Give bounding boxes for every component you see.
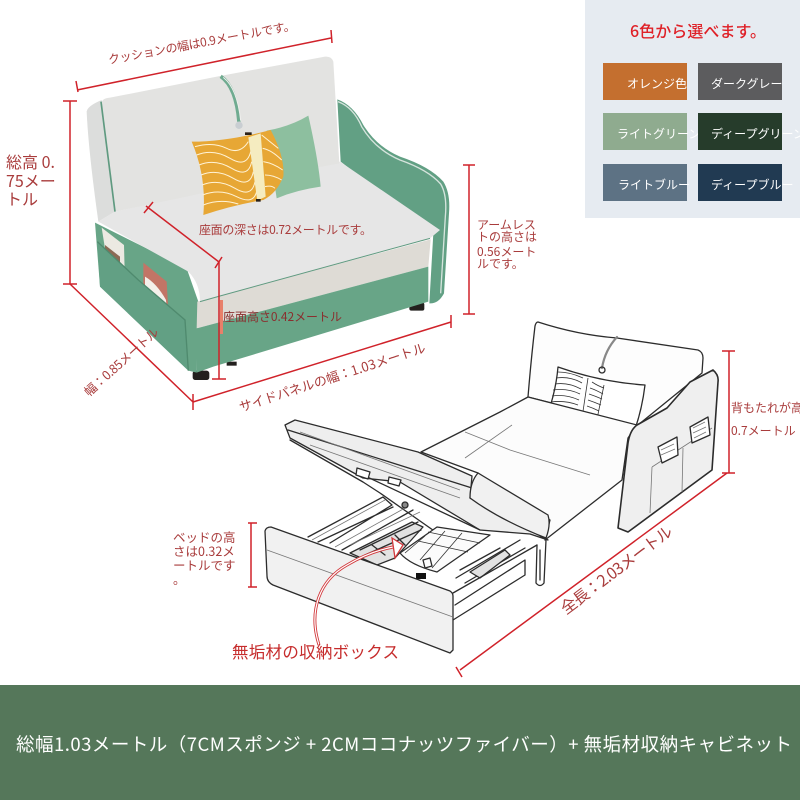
pocket	[97, 242, 188, 371]
backrest	[528, 322, 703, 425]
dimension: total length: 全長：2.03メートル	[555, 519, 677, 619]
folded blanket	[400, 527, 490, 572]
heading: six colours: 6色から選べます。	[630, 18, 766, 42]
swatch: light blue	[603, 164, 690, 201]
swatch: deep blue	[698, 164, 793, 201]
seat cushion	[98, 162, 440, 302]
metal leg	[536, 540, 546, 586]
dimension: side panel width: サイドパネルの幅：1.03メートル	[236, 337, 428, 416]
footer banner	[0, 685, 800, 800]
back cushion	[102, 57, 339, 212]
cushion end and lifted panel	[285, 420, 549, 540]
dimension: cushion width: クッションの幅は0.9メートルです。	[107, 17, 297, 68]
dimension: total height	[6, 101, 77, 284]
dimension: total height: 総高 0.	[6, 149, 55, 173]
arrow: to storage box	[315, 538, 403, 645]
dimension: armrest height	[463, 165, 537, 314]
dimension: seat height	[212, 262, 342, 379]
throw pillow	[548, 367, 645, 432]
footer text: 総幅1.03メートル（7CMスポンジ + 2CMココナッツファイバー）+ 無垢材収納キャビネット	[16, 731, 792, 757]
dimension: armrest height: トの高さは	[477, 228, 537, 245]
dimension: back height: 0.7メートル	[731, 422, 796, 439]
dimension: bed height: ベッドの高	[173, 527, 236, 546]
dimension: seat height: 座面高さ0.42メートル	[223, 308, 342, 325]
dimension: back height	[722, 351, 800, 473]
illustration: line-art open sofa bed	[265, 322, 718, 653]
arm	[337, 99, 449, 303]
swatch: orange	[603, 63, 687, 100]
wheels	[193, 303, 424, 380]
dimension: bed height: ートルです	[173, 555, 236, 574]
dimension: bed height: さは0.32メ	[173, 541, 235, 560]
swatch: light blue: ライトブルー	[618, 176, 690, 193]
storage box interior	[308, 497, 537, 620]
swatch: deep green	[698, 113, 800, 150]
dimension: seat depth	[144, 202, 372, 268]
swatch: orange: オレンジ色	[627, 75, 687, 92]
throw pillow	[192, 116, 321, 215]
dimension: bed height: 。	[173, 569, 186, 588]
arm panel with pocket	[618, 370, 718, 532]
back side panel	[87, 100, 115, 222]
panel: colour options	[585, 0, 800, 218]
dimension: total length	[456, 473, 727, 677]
swatch: light green	[603, 113, 700, 150]
mattress	[421, 397, 637, 540]
label: solid wood storage box: 無垢材の収納ボックス	[232, 639, 399, 663]
dimension: seat depth: 座面の深さは0.72メートルです。	[199, 221, 372, 238]
swatch: deep blue: ディープブルー	[711, 176, 793, 193]
front band	[197, 239, 431, 328]
drawer front	[265, 527, 453, 653]
book: white catalogue	[102, 228, 125, 272]
dimension: side panel width	[193, 315, 451, 416]
book: red	[143, 263, 168, 311]
dimension: cushion width	[76, 17, 332, 92]
dimension: bed height	[173, 523, 257, 588]
dimension: armrest height: アームレス	[477, 216, 536, 233]
dimension: depth: 幅：0.85メートル	[79, 322, 162, 400]
swatch: dark grey: ダークグレー	[711, 75, 783, 92]
front green	[197, 267, 428, 373]
dimension: armrest height: 0.56メート	[477, 243, 536, 260]
side with pocket	[95, 223, 198, 373]
swatch: light green: ライトグリーン	[617, 125, 700, 142]
dimension: depth	[70, 284, 193, 410]
swatch: dark grey	[698, 63, 783, 100]
illustration: green sofa	[87, 57, 449, 380]
dimension: armrest height: ルです。	[477, 255, 524, 272]
centre strap	[221, 76, 239, 122]
dimension: total height: 75メー	[6, 168, 56, 192]
dimension: total height: トル	[6, 186, 38, 210]
